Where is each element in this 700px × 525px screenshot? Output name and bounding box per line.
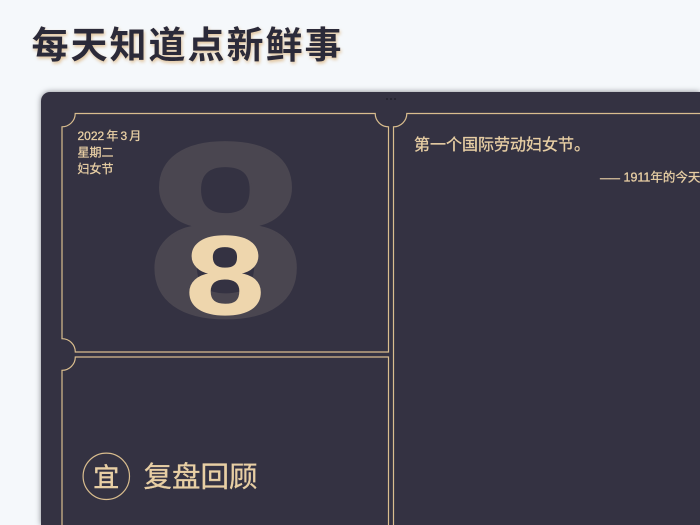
foreground number: 8 xyxy=(185,213,265,338)
panel: advice frame xyxy=(62,357,388,525)
panel: quote frame xyxy=(394,114,700,525)
date text xyxy=(78,129,141,176)
date text: 星期二 xyxy=(78,146,114,160)
date text: 妇女节 xyxy=(78,161,114,176)
icon: three dots menu xyxy=(386,98,396,100)
quote attribution: 1911年的今天 xyxy=(624,170,700,184)
big background number: 8 xyxy=(147,90,304,369)
date text: 2022 年 3 月 xyxy=(78,129,141,143)
title: 每天知道点新鲜事 xyxy=(32,25,344,66)
panel: dark card xyxy=(41,92,700,525)
quote text: 第一个国际劳动妇女节。 xyxy=(414,135,590,154)
icon: 宜 seal xyxy=(83,453,130,499)
advice text: 复盘回顾 xyxy=(144,462,258,494)
quote attribution: —— xyxy=(600,174,620,184)
icon: 宜 seal: 宜 xyxy=(93,462,119,492)
panel: date frame xyxy=(62,114,388,352)
